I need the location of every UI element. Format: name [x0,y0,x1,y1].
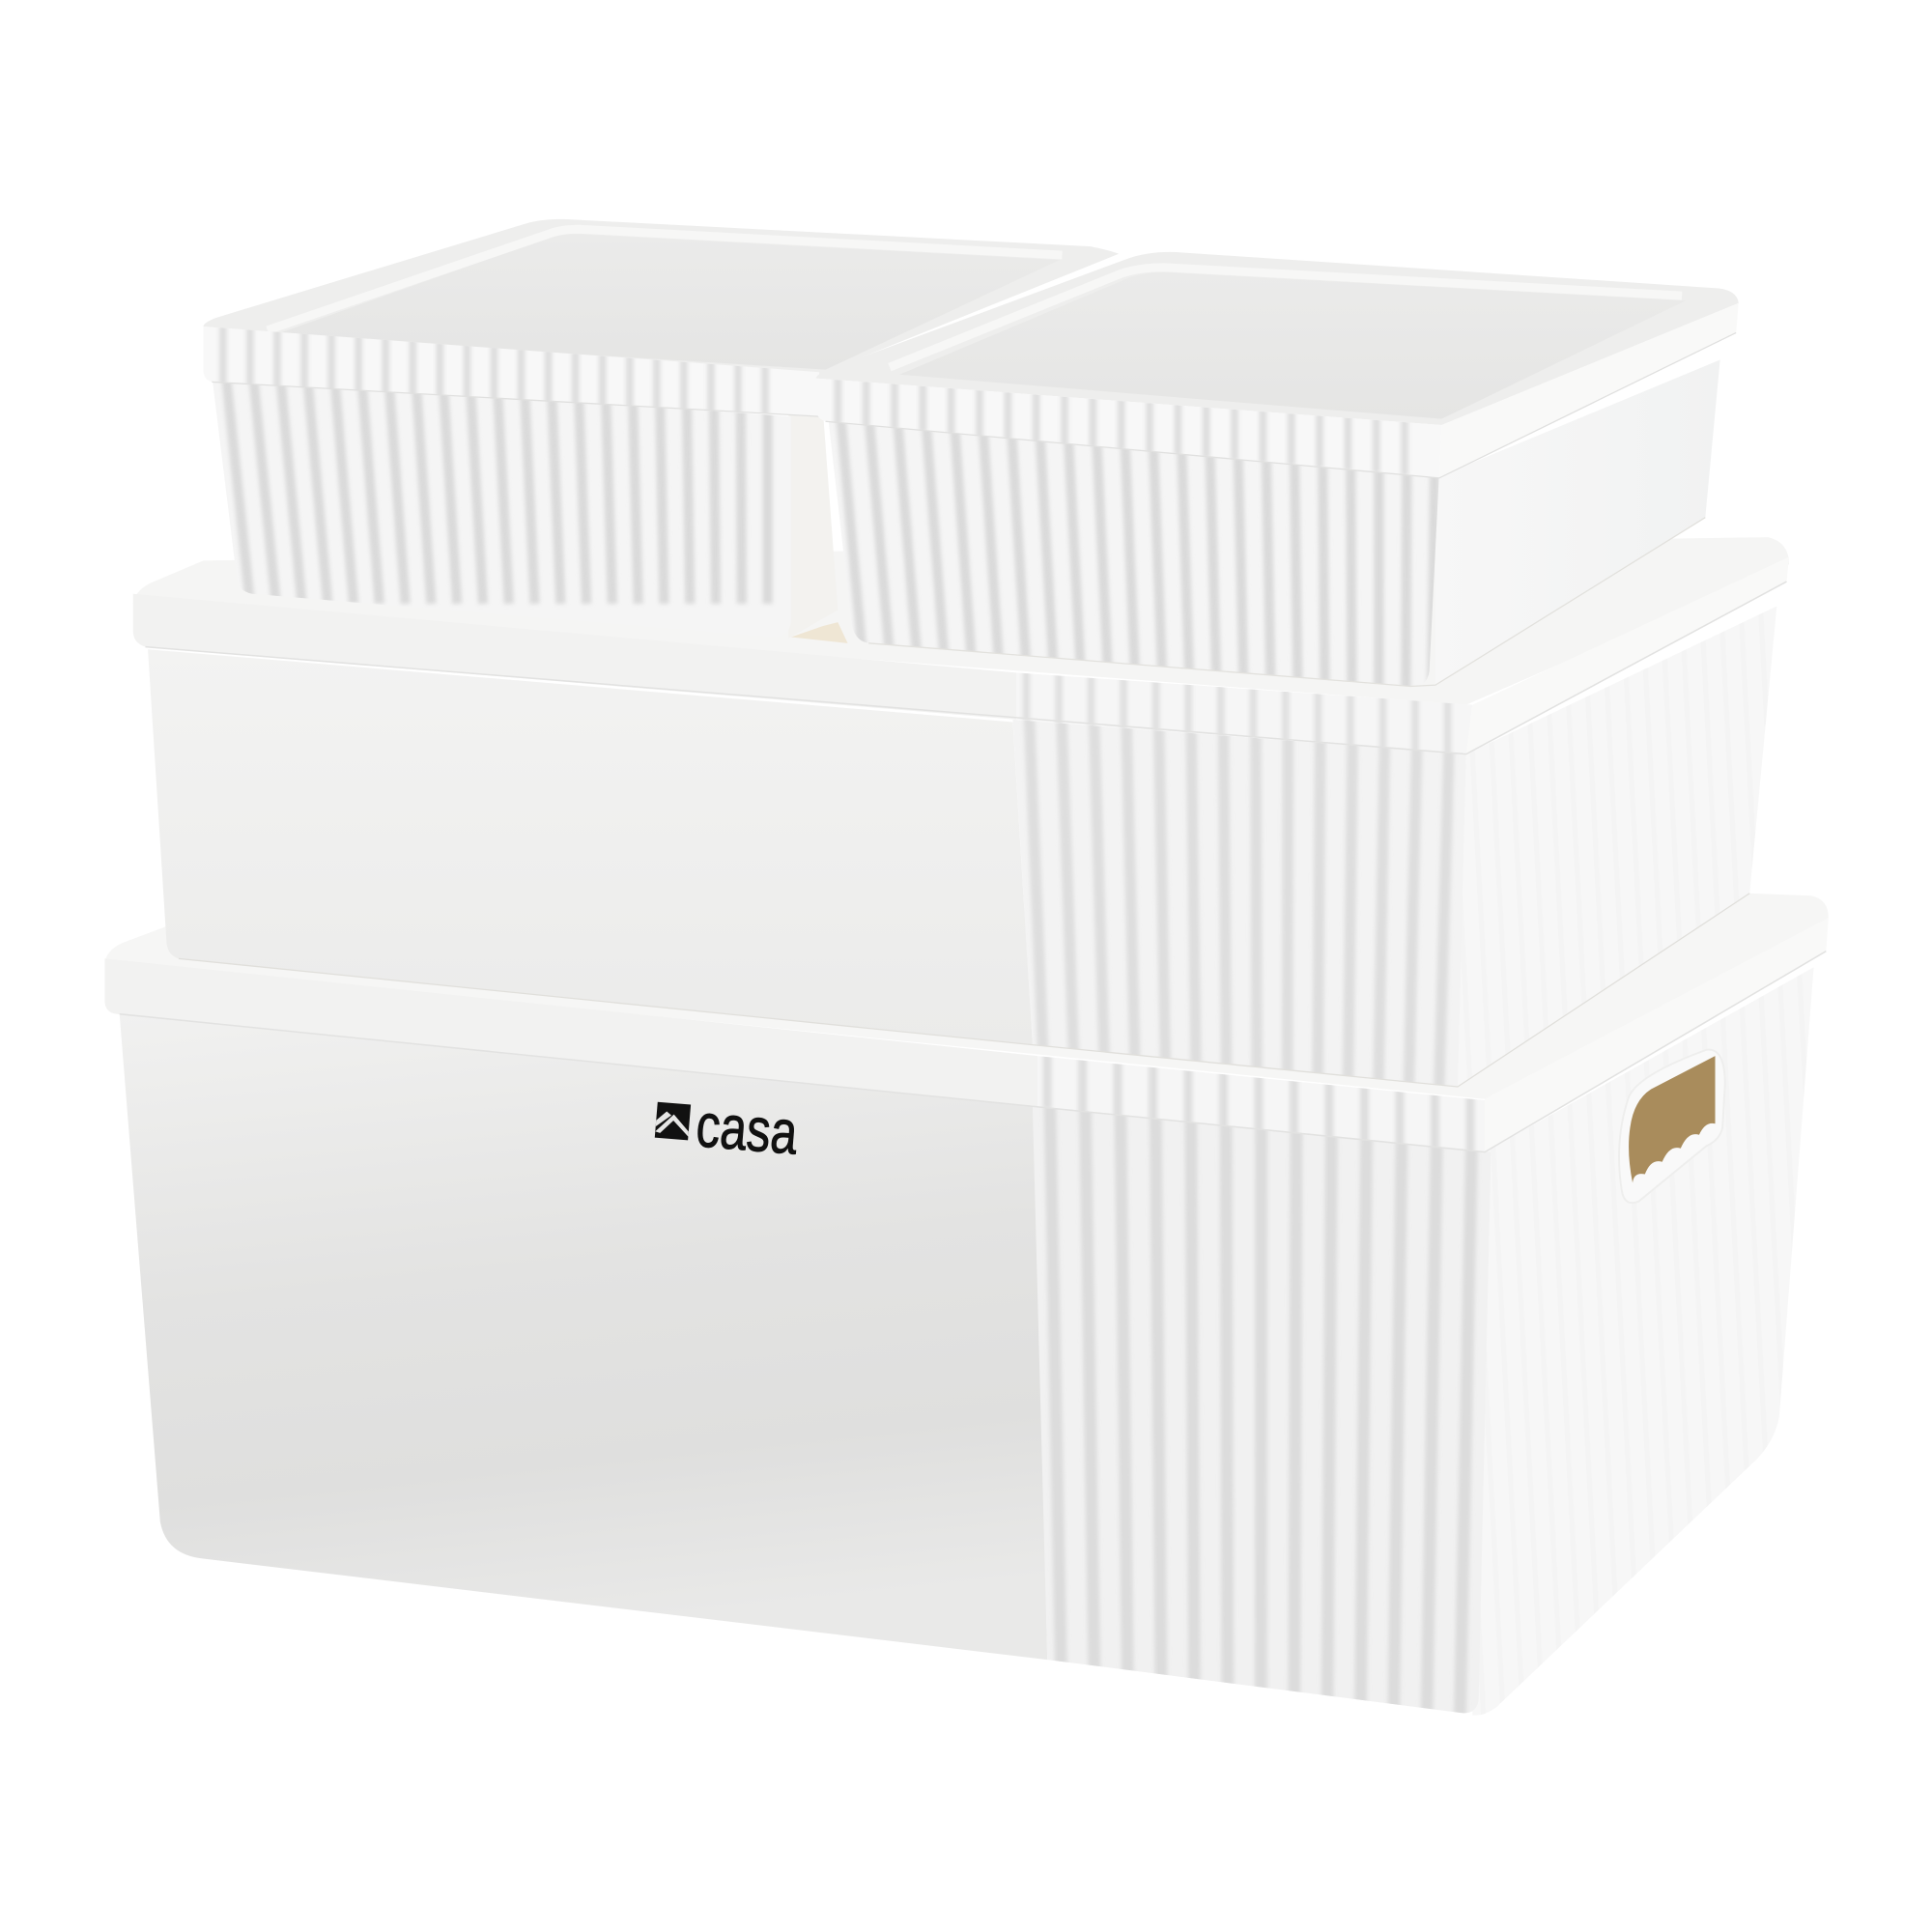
top-right lid shadow line [826,332,1736,478]
top-left lid inner panel [273,234,1060,370]
top-right box front [826,412,1448,696]
top-right box lid front [818,380,1439,477]
handle rim [1619,1050,1725,1203]
cream gap between top boxes [791,622,848,643]
handle cut-out [1619,1050,1725,1203]
middle bin front ribbed panel [1005,708,1472,1096]
top-right lid right rim [1439,303,1739,478]
top-right box lid [815,252,1739,425]
bottom bin front ribbed panel [1023,1096,1503,1725]
top-left box front [213,383,788,605]
bottom bin right side [1472,967,1814,1716]
middle bin lid right rim [1466,557,1789,754]
logo: casa [653,1087,801,1168]
top-right lid groove [890,268,1682,367]
bottom bin lid front smooth [104,958,1037,1106]
bottom large bin [104,894,1829,1725]
top-right lid inner panel [899,272,1686,419]
logo icon: house [655,1102,691,1140]
top-left box lid front [216,328,819,415]
bottom bin lid top surface [104,894,1829,1099]
handle opening [1629,1056,1716,1182]
middle bin lid front smooth [133,594,1016,720]
logo wordmark: casa [694,1090,801,1168]
top-right box right side [1435,359,1720,685]
middle bin front smooth panel [148,649,1033,1045]
middle bin base contact line [179,894,1749,1087]
middle bin right side [1458,607,1776,1087]
middle bin [133,537,1789,1096]
middle lid shadow line [146,582,1786,754]
product photo: stacked white storage boxes [104,219,1828,1715]
bottom bin lid right rim [1485,918,1829,1152]
bottom bin lid front ribbed [1037,1057,1485,1151]
top-left box lid [203,219,1119,376]
top-left small box [197,219,1119,640]
bottom lid shadow line [120,952,1826,1152]
middle bin lid top surface [133,537,1789,705]
top-right box base contact line [868,518,1705,686]
top-right small box [813,252,1739,696]
top-left lid groove [268,229,1062,330]
middle bin lid front ribbed [1016,672,1472,753]
top-left box right wedge [788,412,838,639]
bottom bin front smooth panel [120,1014,1047,1660]
top-left lid shadow line [212,382,819,416]
